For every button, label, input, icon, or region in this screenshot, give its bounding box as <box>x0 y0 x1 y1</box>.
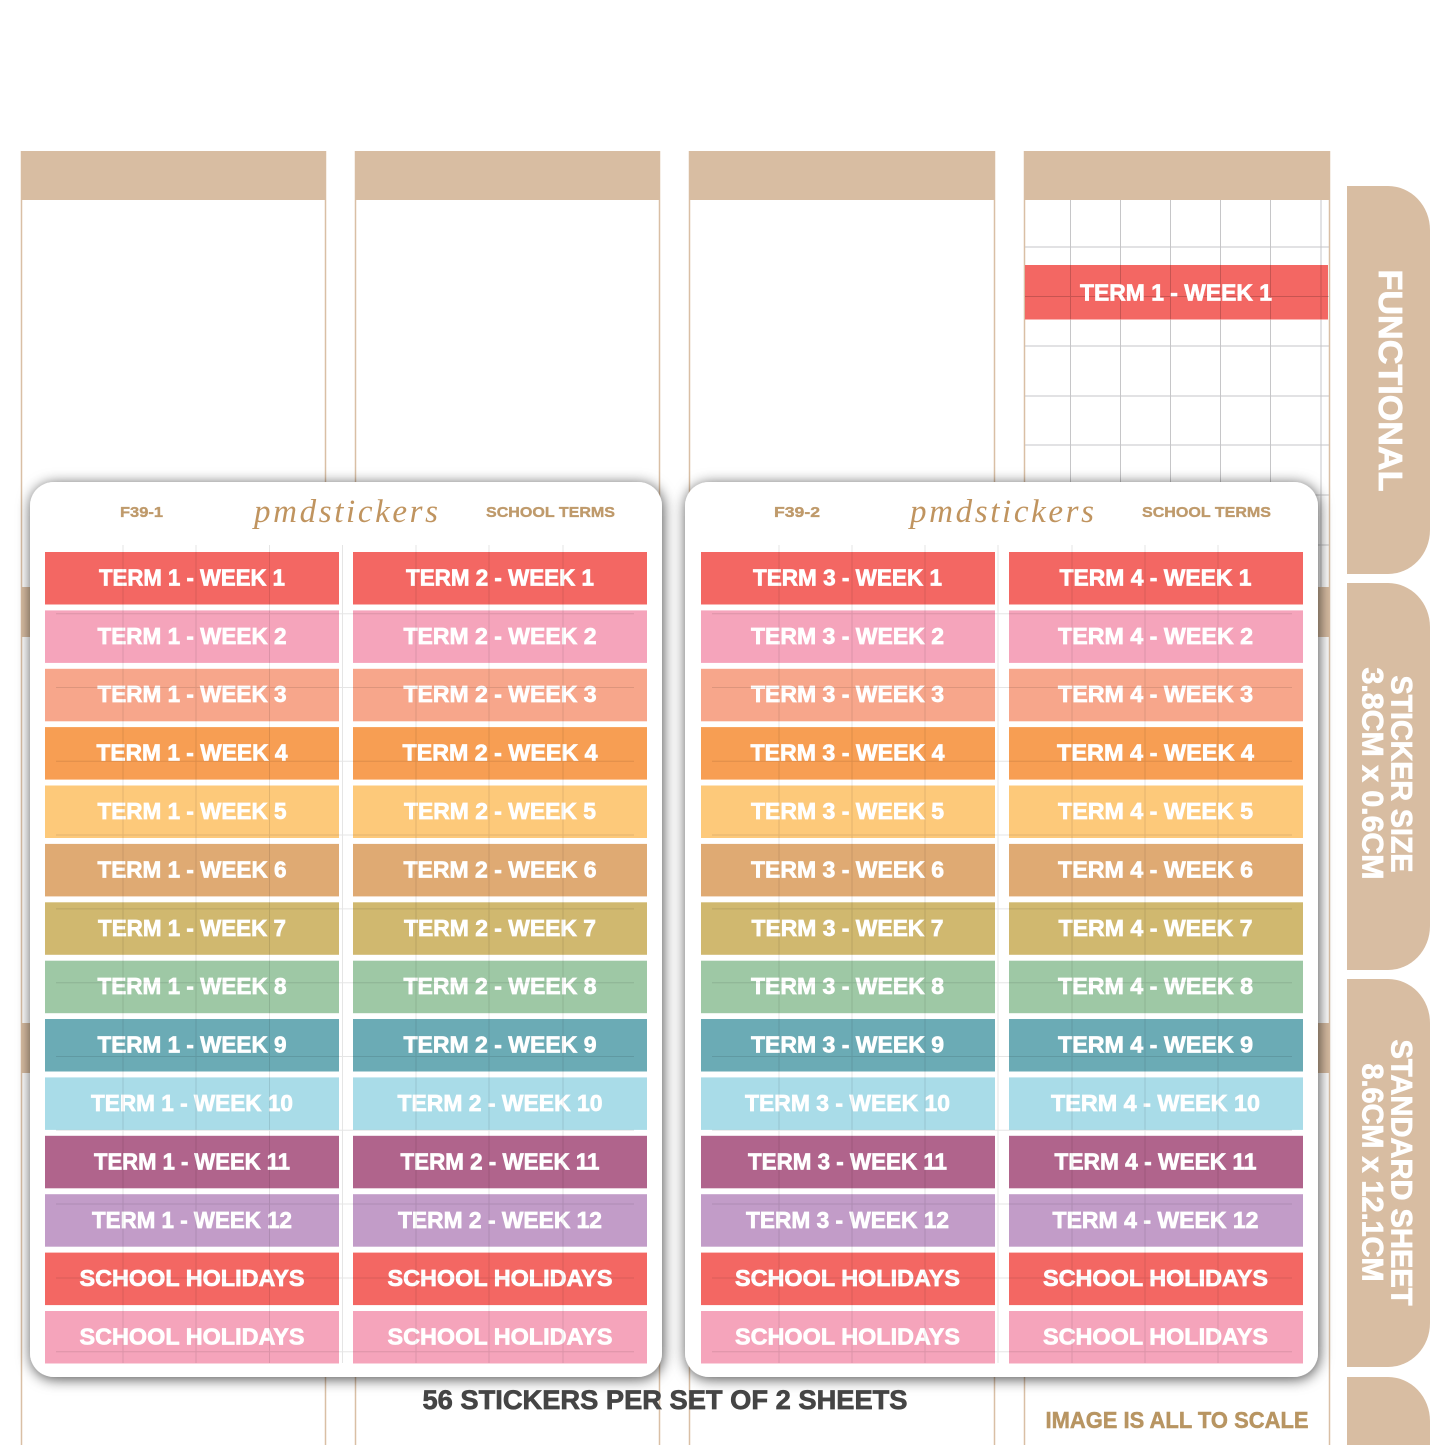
sticker: TERM 2 - WEEK 5 <box>404 798 596 824</box>
sticker: TERM 4 - WEEK 5 <box>1058 798 1253 824</box>
side tab: standard sheet <box>1347 979 1430 1367</box>
sticker: TERM 2 - WEEK 7 <box>404 915 596 941</box>
sticker <box>1009 1194 1303 1247</box>
sticker <box>701 961 995 1013</box>
sticker sheet F39-1 <box>30 482 662 1377</box>
sticker: SCHOOL HOLIDAYS <box>388 1324 612 1350</box>
sticker <box>45 1311 339 1364</box>
sticker <box>701 1253 995 1305</box>
sticker <box>353 786 647 838</box>
sticker <box>45 727 339 780</box>
sticker: TERM 4 - WEEK 6 <box>1058 857 1253 883</box>
sticker: TERM 4 - WEEK 3 <box>1058 681 1253 707</box>
sticker: TERM 1 - WEEK 2 <box>98 623 286 649</box>
sample sticker on planner <box>1025 265 1328 320</box>
sticker <box>701 786 995 838</box>
sticker <box>1009 786 1303 838</box>
sticker <box>353 1253 647 1305</box>
sticker: TERM 2 - WEEK 11 <box>400 1149 600 1175</box>
planner column 1 <box>21 151 326 1445</box>
sticker <box>353 727 647 780</box>
sticker <box>45 669 339 721</box>
side tab: functional: FUNCTIONAL <box>1372 270 1409 492</box>
sticker: TERM 3 - WEEK 9 <box>751 1032 944 1058</box>
sticker: SCHOOL HOLIDAYS <box>1043 1265 1268 1291</box>
sticker: TERM 1 - WEEK 6 <box>98 857 286 883</box>
sticker: TERM 3 - WEEK 2 <box>751 623 944 649</box>
sticker: SCHOOL HOLIDAYS <box>80 1324 304 1350</box>
sticker: TERM 1 - WEEK 10 <box>91 1090 293 1116</box>
sticker: TERM 1 - WEEK 3 <box>98 681 286 707</box>
brand logo: pmdstickers <box>252 494 438 530</box>
sticker <box>45 1019 339 1072</box>
sticker column: term 2 <box>353 552 647 1364</box>
sticker <box>353 610 647 663</box>
sticker <box>45 902 339 955</box>
sticker <box>45 1194 339 1247</box>
sticker <box>1009 1311 1303 1364</box>
sticker <box>45 610 339 663</box>
side tab: standard sheet: STANDARD SHEET <box>1384 1040 1418 1306</box>
sticker: TERM 1 - WEEK 12 <box>92 1207 292 1233</box>
footer: sticker count: 56 STICKERS PER SET OF 2 SHEETS <box>422 1385 908 1415</box>
brand logo: pmdstickers <box>908 494 1094 530</box>
sticker: SCHOOL HOLIDAYS <box>80 1265 304 1291</box>
sticker: TERM 2 - WEEK 4 <box>402 740 598 766</box>
sticker <box>701 669 995 721</box>
sticker <box>701 1077 995 1130</box>
sticker <box>353 902 647 955</box>
sticker <box>701 1136 995 1188</box>
sticker: SCHOOL HOLIDAYS <box>735 1324 960 1350</box>
sticker column: term 3 <box>701 552 995 1364</box>
sticker: TERM 2 - WEEK 2 <box>404 623 596 649</box>
sticker <box>701 552 995 604</box>
sticker: TERM 4 - WEEK 8 <box>1058 973 1253 999</box>
sticker: TERM 3 - WEEK 5 <box>751 798 944 824</box>
sticker <box>701 727 995 780</box>
sticker <box>1009 1136 1303 1188</box>
sheet code: F39-1 <box>120 504 163 521</box>
sticker: TERM 3 - WEEK 8 <box>751 973 944 999</box>
sticker: TERM 1 - WEEK 1 <box>99 565 285 591</box>
sticker: TERM 2 - WEEK 1 <box>406 565 594 591</box>
sticker: TERM 1 - WEEK 5 <box>98 798 287 824</box>
sticker: TERM 4 - WEEK 1 <box>1060 565 1252 591</box>
sticker: TERM 3 - WEEK 6 <box>751 857 944 883</box>
sticker: TERM 1 - WEEK 11 <box>94 1149 290 1175</box>
sticker: TERM 3 - WEEK 7 <box>752 915 944 941</box>
sticker <box>353 961 647 1013</box>
sticker: SCHOOL HOLIDAYS <box>388 1265 612 1291</box>
sticker <box>45 961 339 1013</box>
sticker <box>1009 669 1303 721</box>
sticker: TERM 1 - WEEK 4 <box>96 740 288 766</box>
sticker column: term 1 <box>45 552 339 1364</box>
sticker <box>701 902 995 955</box>
sticker <box>701 1194 995 1247</box>
sticker: TERM 4 - WEEK 4 <box>1057 740 1254 766</box>
sticker <box>353 552 647 604</box>
side tab: sticker size: 3.8CM x 0.6CM <box>1356 668 1388 880</box>
sheet code: F39-2 <box>774 504 820 521</box>
sticker <box>353 669 647 721</box>
sticker <box>45 786 339 838</box>
sticker <box>45 1077 339 1130</box>
sticker: TERM 3 - WEEK 3 <box>751 681 944 707</box>
sticker: SCHOOL HOLIDAYS <box>735 1265 960 1291</box>
footer: scale note: IMAGE IS ALL TO SCALE <box>1046 1407 1308 1433</box>
sticker: TERM 4 - WEEK 12 <box>1052 1207 1258 1233</box>
sticker <box>353 1136 647 1188</box>
sticker: TERM 1 - WEEK 8 <box>98 973 287 999</box>
sample sticker on planner: TERM 1 - WEEK 1 <box>1080 280 1272 306</box>
sticker <box>45 1253 339 1305</box>
sticker: TERM 2 - WEEK 12 <box>398 1207 602 1233</box>
sticker <box>353 844 647 896</box>
sheet title: SCHOOL TERMS <box>486 504 615 521</box>
sticker: TERM 4 - WEEK 10 <box>1051 1090 1260 1116</box>
side tab: sticker size <box>1347 583 1430 970</box>
sticker column: term 4 <box>1009 552 1303 1364</box>
sticker <box>1009 844 1303 896</box>
sticker <box>701 610 995 663</box>
sticker: TERM 3 - WEEK 12 <box>746 1207 949 1233</box>
sticker <box>45 1136 339 1188</box>
sticker: TERM 3 - WEEK 4 <box>750 740 945 766</box>
sticker <box>353 1194 647 1247</box>
sticker: TERM 3 - WEEK 10 <box>745 1090 950 1116</box>
sticker <box>1009 1019 1303 1072</box>
sticker: TERM 1 - WEEK 7 <box>98 915 286 941</box>
side tab: sticker size: STICKER SIZE <box>1384 676 1418 872</box>
sticker <box>1009 552 1303 604</box>
sticker <box>353 1311 647 1364</box>
planner column 2 <box>355 151 660 1445</box>
side tab: standard sheet: 8.6CM x 12.1CM <box>1356 1064 1388 1282</box>
sticker <box>701 1311 995 1364</box>
sticker sheet F39-2 <box>685 482 1318 1377</box>
sticker <box>1009 610 1303 663</box>
sticker <box>45 844 339 896</box>
sticker <box>1009 727 1303 780</box>
sticker: TERM 4 - WEEK 2 <box>1058 623 1253 649</box>
sticker: TERM 2 - WEEK 6 <box>404 857 596 883</box>
sticker <box>45 552 339 604</box>
sticker <box>701 844 995 896</box>
sticker: TERM 1 - WEEK 9 <box>98 1032 286 1058</box>
planner column 3 <box>689 151 995 1445</box>
sheet title: SCHOOL TERMS <box>1142 504 1271 521</box>
sticker: TERM 4 - WEEK 9 <box>1058 1032 1253 1058</box>
sticker: TERM 2 - WEEK 9 <box>404 1032 596 1058</box>
sticker <box>1009 1253 1303 1305</box>
sticker: TERM 2 - WEEK 8 <box>404 973 597 999</box>
sticker <box>1009 902 1303 955</box>
sticker <box>353 1077 647 1130</box>
sticker <box>701 1019 995 1072</box>
sticker: TERM 2 - WEEK 3 <box>404 681 596 707</box>
side tab: functional <box>1347 186 1430 574</box>
sticker: TERM 3 - WEEK 1 <box>753 565 942 591</box>
sticker: SCHOOL HOLIDAYS <box>1043 1324 1268 1350</box>
sticker <box>1009 1077 1303 1130</box>
sticker: TERM 2 - WEEK 10 <box>398 1090 602 1116</box>
side tab: partial bottom <box>1347 1377 1430 1445</box>
sticker: TERM 4 - WEEK 11 <box>1054 1149 1257 1175</box>
sticker <box>353 1019 647 1072</box>
sticker <box>1009 961 1303 1013</box>
sticker: TERM 4 - WEEK 7 <box>1058 915 1252 941</box>
sticker: TERM 3 - WEEK 11 <box>748 1149 947 1175</box>
planner column 4 with grid <box>1024 151 1330 1445</box>
